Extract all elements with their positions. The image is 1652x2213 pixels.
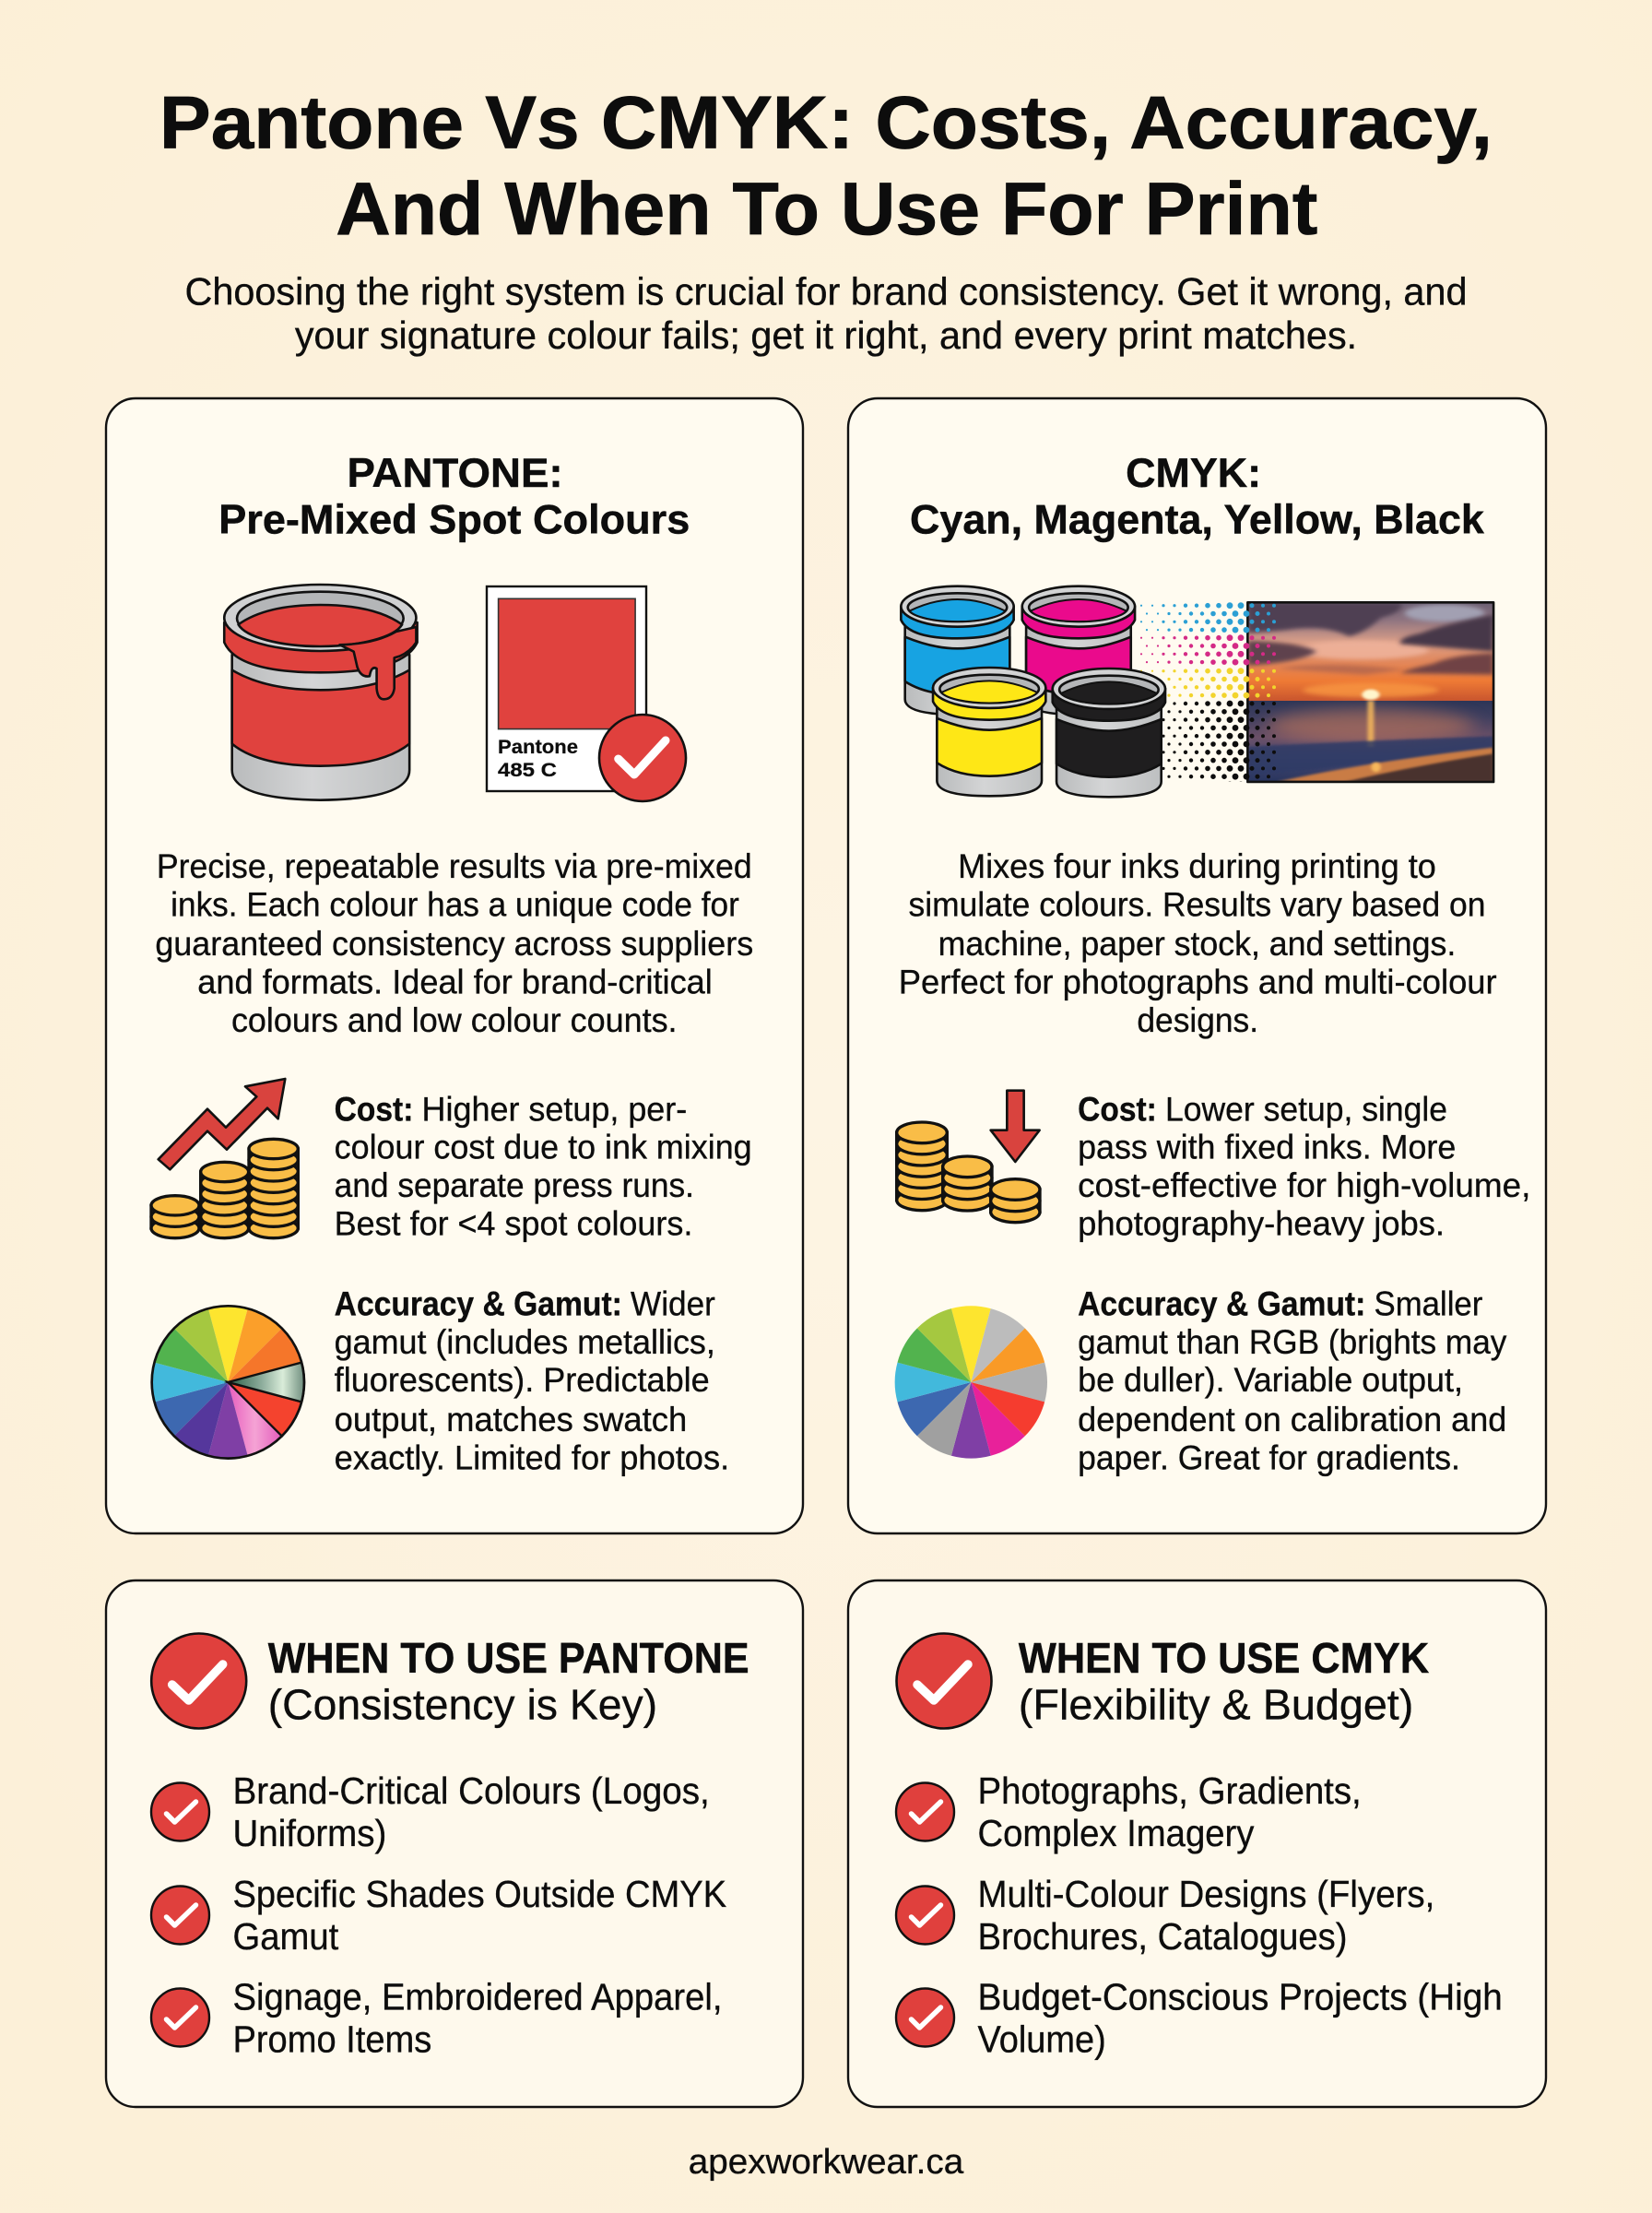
Pantone description: colours and low colour counts. bbox=[231, 1000, 678, 1039]
Pantone description: Precise, repeatable results via pre-mixed bbox=[157, 846, 752, 885]
subtitle: your signature colour fails; get it right, and every print matches. bbox=[295, 314, 1357, 357]
Pantone heading: Pre-Mixed Spot Colours bbox=[218, 498, 690, 543]
swatch label: 485 C bbox=[498, 760, 557, 781]
CMYK description: simulate colours. Results vary based on bbox=[909, 884, 1485, 923]
CMYK cost text: Cost: bbox=[1078, 1089, 1157, 1128]
Pantone cost text: Best for <4 spot colours. bbox=[335, 1203, 692, 1242]
CMYK description: Mixes four inks during printing to bbox=[958, 846, 1436, 885]
check item 3 bbox=[151, 1976, 723, 2060]
panel: when to use CMYK bbox=[848, 1580, 1546, 2107]
check item 1: Uniforms) bbox=[232, 1812, 386, 1854]
check item 1 bbox=[896, 1769, 1362, 1854]
Pantone accuracy text: Wider bbox=[631, 1284, 715, 1323]
swatch label bbox=[498, 737, 578, 781]
CMYK heading: Cyan, Magenta, Yellow, Black bbox=[910, 498, 1484, 543]
check item 3: Promo Items bbox=[232, 2018, 431, 2060]
CMYK description: Perfect for photographs and multi-colour bbox=[899, 963, 1497, 1001]
Pantone cost text: Cost: bbox=[335, 1089, 413, 1128]
check item 3 bbox=[896, 1976, 1503, 2060]
check item 3: Volume) bbox=[977, 2018, 1106, 2060]
Pantone accuracy text: gamut (includes metallics, bbox=[335, 1322, 715, 1361]
CMYK heading: CMYK: bbox=[1126, 451, 1261, 496]
icon: CMYK ink cans bbox=[901, 586, 1165, 797]
panel: Pantone bbox=[106, 398, 803, 1533]
panel: when to use Pantone bbox=[106, 1580, 803, 2107]
CMYK cost text: cost-effective for high-volume, bbox=[1078, 1166, 1530, 1204]
icon: large check badge bbox=[896, 1634, 992, 1728]
CMYK cost text: photography-heavy jobs. bbox=[1078, 1203, 1445, 1242]
heading: when to use CMYK: WHEN TO USE CMYK bbox=[1019, 1634, 1429, 1682]
check item 1: Brand-Critical Colours (Logos, bbox=[232, 1769, 710, 1812]
icon: CMYK gamut wheel bbox=[895, 1306, 1047, 1459]
Pantone cost text bbox=[335, 1089, 752, 1242]
Pantone description bbox=[155, 846, 753, 1039]
CMYK description bbox=[899, 846, 1497, 1039]
heading: when to use CMYK: (Flexibility & Budget) bbox=[1019, 1680, 1413, 1728]
check item 2: Multi-Colour Designs (Flyers, bbox=[977, 1873, 1434, 1915]
check item 1: Complex Imagery bbox=[977, 1812, 1255, 1854]
CMYK accuracy text: dependent on calibration and bbox=[1078, 1400, 1506, 1438]
Pantone description: and formats. Ideal for brand-critical bbox=[197, 963, 713, 1001]
icon: rising cost coins bbox=[151, 1079, 298, 1238]
CMYK accuracy text: gamut than RGB (brights may bbox=[1078, 1322, 1507, 1361]
CMYK accuracy text: Accuracy & Gamut: bbox=[1078, 1284, 1365, 1323]
Pantone accuracy text bbox=[335, 1284, 729, 1476]
CMYK cost text: pass with fixed inks. More bbox=[1078, 1128, 1456, 1166]
CMYK description: designs. bbox=[1137, 1000, 1258, 1039]
panel: CMYK bbox=[848, 398, 1546, 1533]
CMYK accuracy text: paper. Great for gradients. bbox=[1078, 1438, 1460, 1476]
Pantone accuracy text: exactly. Limited for photos. bbox=[335, 1438, 729, 1476]
CMYK accuracy text: Smaller bbox=[1375, 1284, 1482, 1323]
check item 1 bbox=[151, 1769, 710, 1854]
subtitle bbox=[184, 270, 1468, 357]
Pantone accuracy text: fluorescents). Predictable bbox=[335, 1360, 710, 1399]
subtitle: Choosing the right system is crucial for brand consistency. Get it wrong, and bbox=[184, 270, 1468, 314]
heading: when to use CMYK bbox=[1019, 1634, 1429, 1728]
icon: red paint can bbox=[224, 585, 418, 800]
title: And When To Use For Print bbox=[336, 168, 1317, 251]
heading: when to use Pantone bbox=[268, 1634, 749, 1728]
CMYK cost text: Lower setup, single bbox=[1165, 1089, 1447, 1128]
Pantone description: inks. Each colour has a unique code for bbox=[171, 884, 739, 923]
check item 2: Gamut bbox=[232, 1915, 338, 1958]
Pantone heading bbox=[218, 451, 690, 543]
image: sunset photo bbox=[1247, 602, 1493, 782]
heading: when to use Pantone: (Consistency is Key) bbox=[268, 1680, 657, 1728]
Pantone heading: PANTONE: bbox=[347, 451, 563, 496]
Pantone cost text: colour cost due to ink mixing bbox=[335, 1128, 752, 1166]
Pantone accuracy text: Accuracy & Gamut: bbox=[335, 1284, 622, 1323]
check item 3: Signage, Embroidered Apparel, bbox=[232, 1976, 723, 2018]
check item 2 bbox=[151, 1873, 726, 1958]
CMYK description: machine, paper stock, and settings. bbox=[938, 924, 1456, 963]
icon: large check badge bbox=[151, 1634, 246, 1728]
CMYK accuracy text: be duller). Variable output, bbox=[1078, 1360, 1463, 1399]
check item 2: Specific Shades Outside CMYK bbox=[232, 1873, 726, 1915]
check item 2: Brochures, Catalogues) bbox=[977, 1915, 1347, 1958]
Pantone accuracy text: output, matches swatch bbox=[335, 1400, 687, 1438]
heading: when to use Pantone: WHEN TO USE PANTONE bbox=[268, 1634, 749, 1682]
halftone dots bbox=[1141, 606, 1274, 793]
swatch label: Pantone bbox=[498, 737, 578, 758]
Pantone cost text: and separate press runs. bbox=[335, 1166, 694, 1204]
CMYK cost text bbox=[1078, 1089, 1530, 1242]
check item 2 bbox=[896, 1873, 1434, 1958]
CMYK accuracy text bbox=[1078, 1284, 1507, 1476]
Pantone description: guaranteed consistency across suppliers bbox=[155, 924, 753, 963]
check item 1: Photographs, Gradients, bbox=[977, 1769, 1362, 1812]
icon: swatch check badge bbox=[599, 715, 686, 801]
title: Pantone Vs CMYK: Costs, Accuracy, bbox=[159, 82, 1493, 165]
title bbox=[159, 82, 1493, 251]
CMYK heading bbox=[910, 451, 1484, 543]
icon: Pantone gamut wheel bbox=[152, 1306, 304, 1459]
icon: falling cost coins bbox=[897, 1091, 1040, 1223]
check item 3: Budget-Conscious Projects (High bbox=[977, 1976, 1503, 2018]
footer URL: apexworkwear.ca bbox=[689, 2142, 964, 2182]
icon: Pantone swatch card bbox=[487, 586, 686, 801]
Pantone cost text: Higher setup, per- bbox=[422, 1089, 687, 1128]
